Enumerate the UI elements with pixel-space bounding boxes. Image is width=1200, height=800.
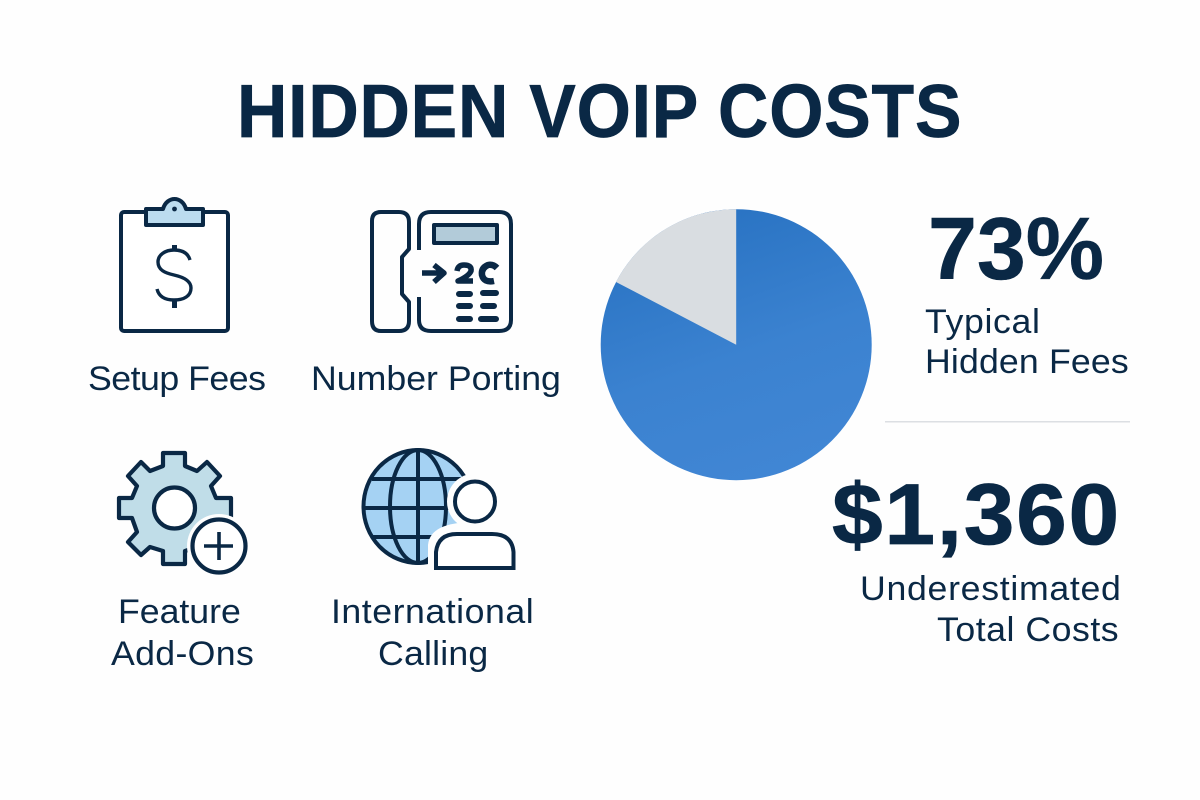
stat: 73% xyxy=(925,199,1129,381)
label: setup fees: Setup Fees xyxy=(88,360,266,398)
label: feature add-ons xyxy=(111,593,254,673)
icon item: number porting xyxy=(311,212,561,398)
stat label: underestimated total costs xyxy=(860,570,1121,649)
label: international calling xyxy=(331,593,534,673)
pie chart xyxy=(601,209,872,480)
stat label: typical hidden fees: Typical xyxy=(925,303,1040,341)
stat label: typical hidden fees: Hidden Fees xyxy=(925,343,1129,381)
label: feature add-ons: Feature xyxy=(118,593,241,631)
icon: gear with plus xyxy=(119,453,251,578)
stat label: underestimated total costs: Underestimated xyxy=(860,570,1121,608)
title: HIDDEN VOIP COSTS xyxy=(237,70,961,154)
icon: desk phone with keypad xyxy=(372,212,511,331)
stat: $1,360 xyxy=(832,466,1121,649)
stat label: typical hidden fees xyxy=(925,303,1129,381)
icon item: international calling xyxy=(331,450,534,673)
label: feature add-ons: Add-Ons xyxy=(111,635,254,673)
stat: $1,360: $1,360 xyxy=(832,466,1119,562)
icon: globe with person xyxy=(364,450,522,575)
label: international calling: International xyxy=(331,593,534,631)
stat label: underestimated total costs: Total Costs xyxy=(937,611,1119,649)
label: international calling: Calling xyxy=(378,635,488,673)
icon: clipboard with dollar sign xyxy=(121,199,228,331)
icon item: feature add-ons xyxy=(111,453,254,673)
label: number porting: Number Porting xyxy=(311,360,561,398)
icon item: setup fees xyxy=(88,199,266,398)
stat: 73%: 73% xyxy=(928,199,1104,298)
